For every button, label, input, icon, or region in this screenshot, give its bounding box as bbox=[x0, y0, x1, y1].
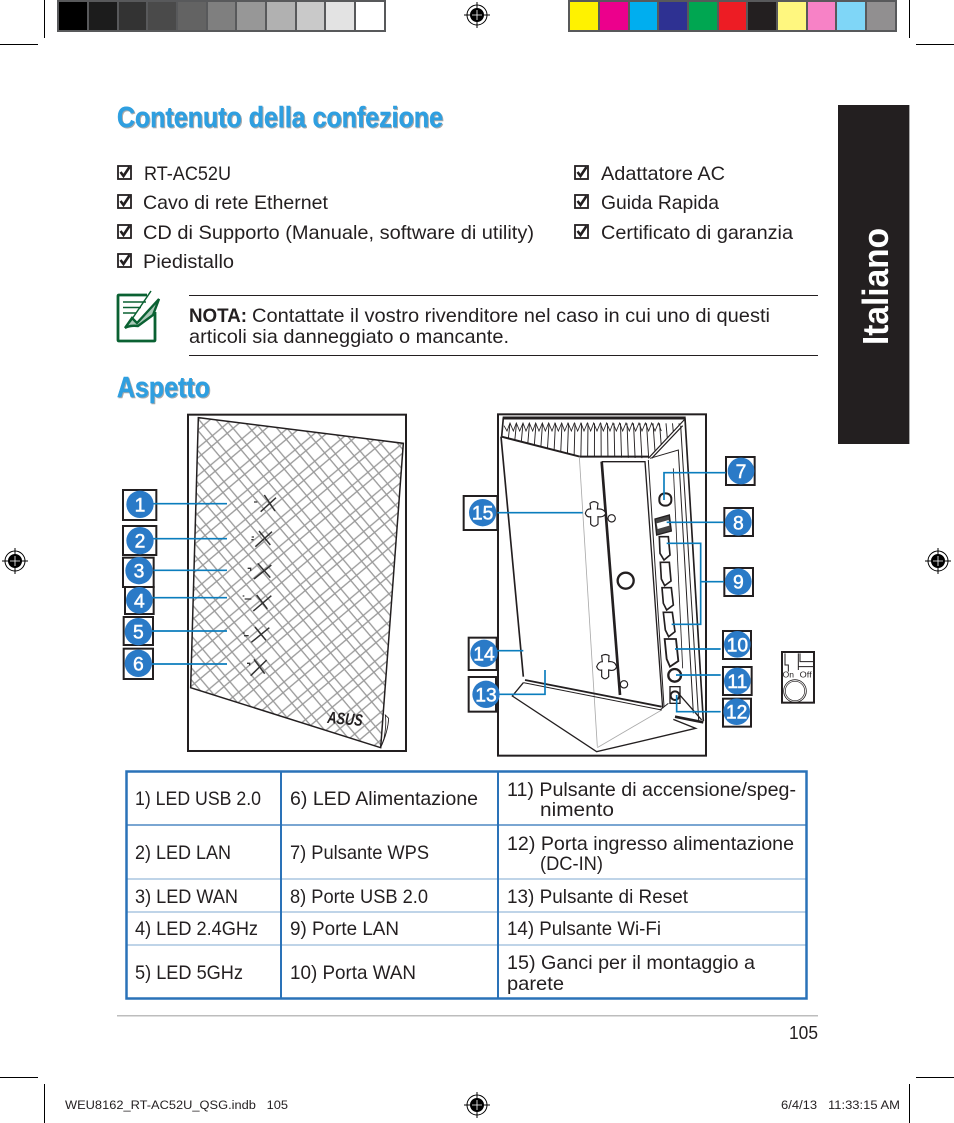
callout 8 bbox=[667, 508, 753, 536]
column 2 bbox=[290, 788, 478, 984]
column 3: nimento bbox=[540, 799, 614, 821]
callout 15: 15 bbox=[472, 504, 493, 525]
callout 2: 2 bbox=[135, 532, 145, 553]
panel: router back view bbox=[464, 414, 814, 756]
note callout: Contattate il vostro rivenditore nel caso in cui uno di questi bbox=[252, 305, 770, 327]
callout 13: 13 bbox=[475, 685, 497, 706]
panel: router front view bbox=[123, 415, 406, 751]
footer rule bbox=[117, 1015, 818, 1016]
checklist text: RT-AC52U bbox=[144, 163, 231, 185]
callout 6 bbox=[124, 649, 227, 679]
inset: power switch bbox=[782, 652, 814, 703]
note callout bbox=[189, 295, 818, 356]
checklist text bbox=[143, 163, 793, 273]
note callout: NOTA: bbox=[189, 305, 247, 327]
router back body bbox=[501, 418, 703, 752]
column 3: 12) Porta ingresso alimentazione bbox=[507, 833, 794, 855]
column 3: 11) Pulsante di accensione/speg- bbox=[507, 779, 796, 801]
column 3: 13) Pulsante di Reset bbox=[507, 886, 689, 908]
column 2: 9) Porte LAN bbox=[290, 918, 399, 940]
language side tab: Italiano bbox=[855, 228, 896, 345]
language side tab bbox=[838, 105, 910, 444]
inset: power switch: On bbox=[783, 670, 794, 680]
callout 1: 1 bbox=[135, 495, 145, 516]
column 2: 6) LED Alimentazione bbox=[290, 788, 478, 810]
callout 10 bbox=[675, 631, 751, 659]
checklist text: Cavo di rete Ethernet bbox=[143, 192, 329, 214]
checklist text: CD di Supporto (Manuale, software di utility) bbox=[143, 222, 534, 244]
column 1: 3) LED WAN bbox=[135, 886, 238, 908]
column 3: 15) Ganci per il montaggio a bbox=[507, 952, 755, 974]
callout 14 bbox=[469, 638, 523, 670]
router front lattice bbox=[191, 418, 403, 748]
column 1: 2) LED LAN bbox=[135, 842, 231, 864]
checklist: package contents bbox=[118, 163, 793, 273]
registration mark right bbox=[925, 548, 951, 574]
column 2: 7) Pulsante WPS bbox=[290, 842, 429, 864]
callout 11: 11 bbox=[727, 672, 747, 693]
heading: package contents: Contenuto della confezione bbox=[117, 102, 443, 134]
column 3 bbox=[507, 779, 796, 995]
callout 14: 14 bbox=[473, 644, 495, 665]
column 1: 5) LED 5GHz bbox=[135, 962, 243, 984]
callout 12: 12 bbox=[726, 703, 747, 724]
callout 5: 5 bbox=[133, 623, 144, 644]
print slug: date: 6/4/13 11:33:15 AM bbox=[781, 1100, 900, 1112]
column 3: 14) Pulsante Wi-Fi bbox=[507, 918, 661, 940]
column 3: (DC-IN) bbox=[540, 853, 603, 875]
callout 7 bbox=[664, 457, 755, 500]
checklist text: Certificato di garanzia bbox=[601, 222, 793, 244]
print slug: file name: WEU8162_RT-AC52U_QSG.indb 105 bbox=[65, 1100, 288, 1112]
checklist text: Piedistallo bbox=[143, 251, 234, 273]
callout 3 bbox=[123, 557, 227, 587]
wall mount hooks and holes bbox=[585, 502, 634, 688]
callout 11 bbox=[676, 667, 752, 695]
table grid bbox=[126, 771, 807, 999]
callout 15 bbox=[464, 496, 583, 530]
registration mark top bbox=[464, 2, 490, 28]
table: legend of parts bbox=[126, 771, 807, 999]
greyscale colour bar bbox=[57, 0, 386, 32]
callout 3: 3 bbox=[134, 562, 144, 583]
callout 7: 7 bbox=[736, 462, 746, 483]
ASUS logo: ASUS bbox=[326, 708, 364, 730]
checklist text: Guida Rapida bbox=[601, 192, 719, 214]
process colour bar bbox=[568, 0, 897, 32]
note callout: articoli sia danneggiato o mancante. bbox=[189, 326, 509, 348]
callout 8: 8 bbox=[733, 513, 744, 534]
callout 5 bbox=[124, 617, 227, 645]
inset: power switch: Off bbox=[800, 670, 812, 680]
column 2: 8) Porte USB 2.0 bbox=[290, 886, 428, 908]
callout 4: 4 bbox=[134, 591, 145, 612]
page number: 105 bbox=[789, 1023, 818, 1043]
heading: appearance: Aspetto bbox=[117, 372, 210, 404]
callout 6: 6 bbox=[133, 654, 144, 675]
column 3: parete bbox=[507, 973, 564, 995]
callout 1 bbox=[123, 490, 227, 520]
column 1: 4) LED 2.4GHz bbox=[135, 918, 258, 940]
icon: note bbox=[118, 291, 159, 341]
rear ports bbox=[655, 493, 681, 703]
column 1 bbox=[135, 788, 261, 984]
registration mark bottom bbox=[464, 1092, 490, 1118]
LED marks bbox=[243, 495, 276, 676]
callout 4 bbox=[125, 587, 227, 614]
vent band bbox=[502, 418, 686, 460]
callout 12 bbox=[677, 695, 751, 727]
checkboxes bbox=[118, 166, 588, 267]
callout 9 bbox=[667, 543, 753, 624]
callout 10: 10 bbox=[727, 635, 748, 656]
callout 9: 9 bbox=[733, 573, 744, 594]
callout 13 bbox=[469, 670, 545, 712]
checklist text: Adattatore AC bbox=[601, 163, 725, 185]
column 1: 1) LED USB 2.0 bbox=[135, 788, 261, 810]
registration mark left bbox=[2, 548, 28, 574]
callout 2 bbox=[123, 526, 227, 555]
column 2: 10) Porta WAN bbox=[290, 962, 416, 984]
